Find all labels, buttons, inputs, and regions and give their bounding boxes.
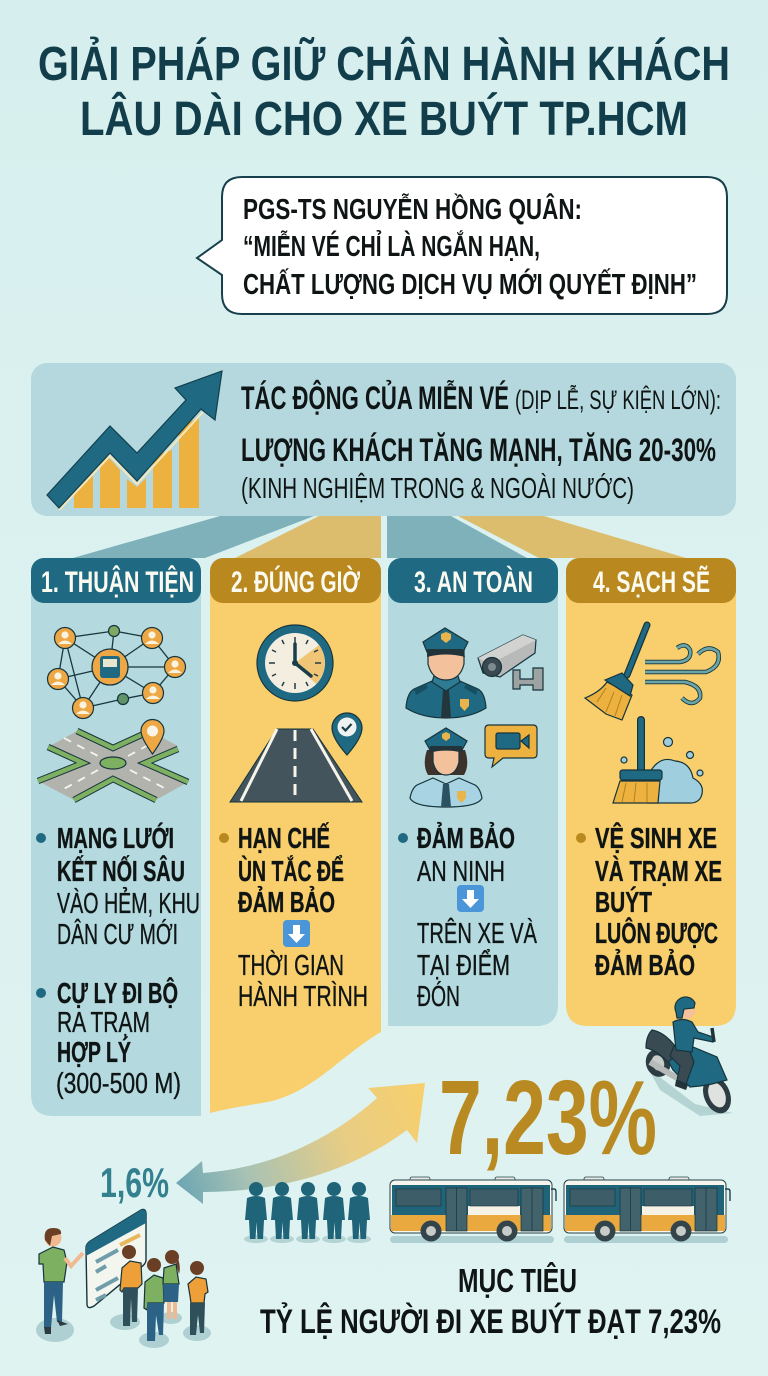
- text: punctuality points: ĐẢM BẢO: [238, 885, 335, 919]
- icon: broom and wind: [585, 625, 719, 720]
- person green skirt: [163, 1250, 180, 1319]
- text: punctuality points: [219, 821, 368, 1013]
- heading: 4: 4. SẠCH SẼ: [593, 565, 710, 599]
- icon: male officer: [406, 628, 486, 718]
- panel: 1 convenience: [31, 558, 201, 1116]
- text: convenience points: CỰ LY ĐI BỘ: [57, 976, 178, 1010]
- text: convenience points: KẾT NỐI SÂU: [57, 854, 185, 888]
- heading: 1: [31, 558, 201, 603]
- text: safety points: ĐÓN: [417, 980, 460, 1013]
- person presenting: [39, 1228, 83, 1334]
- text: convenience points: (300-500 M): [56, 1068, 181, 1100]
- icon: clock: [257, 625, 333, 701]
- icon: mop and foam: [613, 720, 703, 803]
- goal text: [260, 1262, 721, 1341]
- arrow: growth from 1.6% to 7.23%: [176, 1083, 425, 1204]
- impact text: TÁC ĐỘNG CỦA MIỄN VÉ: [241, 380, 509, 416]
- icon: people at information board: [36, 1210, 211, 1348]
- icon: network: [48, 626, 186, 718]
- panel: impact of free fares: [31, 363, 736, 516]
- text: safety points: ĐẢM BẢO: [417, 821, 515, 855]
- text: safety points: TẠI ĐIỂM: [417, 948, 510, 982]
- text: cleanliness points: ĐẢM BẢO: [595, 948, 695, 982]
- person green front: [144, 1258, 164, 1341]
- stat: 7,23%: 7,23%: [439, 1059, 657, 1177]
- goal text: MỤC TIÊU: [458, 1262, 577, 1299]
- title: [38, 36, 730, 146]
- text: convenience points: RA TRẠM: [57, 1007, 150, 1039]
- text: convenience points: HỢP LÝ: [57, 1035, 131, 1069]
- speech bubble quote: PGS-TS NGUYỄN HỒNG QUÂN:: [243, 192, 582, 226]
- text: safety points: AN NINH: [417, 856, 505, 888]
- speech bubble quote: “MIỄN VÉ CHỈ LÀ NGẮN HẠN,: [243, 229, 540, 263]
- panel: 4 cleanliness: [566, 558, 736, 1026]
- heading: 1: 1. THUẬN TIỆN: [41, 565, 194, 599]
- connector bands: [73, 516, 686, 558]
- text: punctuality points: HÀNH TRÌNH: [238, 980, 368, 1013]
- text: safety points: [398, 821, 537, 1013]
- person orange: [120, 1245, 142, 1326]
- icon: camera: [478, 635, 543, 690]
- text: cleanliness points: [576, 821, 722, 982]
- heading: 3: [388, 558, 558, 603]
- text: convenience points: DÂN CƯ MỚI: [57, 918, 178, 951]
- text: convenience points: [36, 821, 200, 1100]
- icon: down arrow: [457, 885, 484, 912]
- stat: 1,6%: 1,6%: [100, 1159, 169, 1206]
- icon: down arrow: [283, 920, 310, 947]
- impact text: [241, 380, 721, 505]
- text: cleanliness points: BUÝT: [595, 885, 652, 919]
- icon: rising chart: [47, 371, 222, 510]
- icon: bus two: [564, 1177, 730, 1243]
- icon: row of people: [244, 1182, 371, 1243]
- panel: 3 safety: [388, 558, 558, 1026]
- panel: 2 punctuality: [210, 558, 381, 1113]
- person orange right: [188, 1261, 208, 1335]
- heading: 2: 2. ĐÚNG GIỜ: [231, 565, 360, 599]
- icon: intersection: [38, 720, 188, 800]
- heading: 3: 3. AN TOÀN: [414, 565, 533, 599]
- text: convenience points: VÀO HẺM, KHU: [57, 886, 200, 920]
- icon: motorbike rider: [642, 997, 736, 1117]
- text: punctuality points: HẠN CHẾ: [238, 821, 330, 855]
- text: punctuality points: ÙN TẮC ĐỂ: [238, 854, 344, 888]
- text: punctuality points: THỜI GIAN: [238, 949, 344, 982]
- speech bubble quote: [197, 177, 727, 314]
- text: cleanliness points: VỆ SINH XE: [595, 821, 717, 855]
- icon: road with pin: [230, 713, 362, 802]
- text: convenience points: MẠNG LƯỚI: [57, 821, 174, 855]
- icon: female officer: [410, 728, 482, 807]
- icon: video bubble: [485, 725, 537, 767]
- heading: 2: [210, 558, 381, 603]
- heading: 4: [566, 558, 736, 603]
- text: safety points: TRÊN XE VÀ: [417, 917, 537, 950]
- icon: bus one: [390, 1177, 556, 1243]
